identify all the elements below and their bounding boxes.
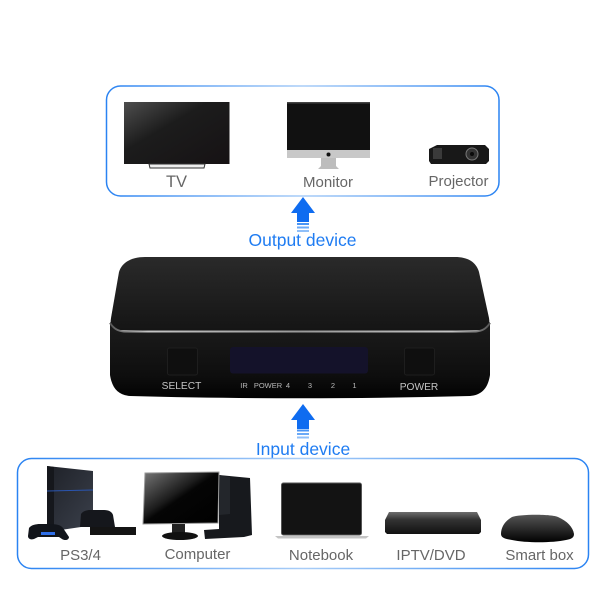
icon: notebook [275, 483, 369, 538]
label: indicators [240, 381, 357, 390]
label: PS3/4: PS3/4 [60, 547, 101, 564]
label: indicators: 4 [286, 381, 290, 390]
label: indicators: 2 [331, 381, 335, 390]
device: HDMI switch [110, 257, 490, 398]
icon: PS4 with controllers [28, 466, 136, 540]
icon: smart box [501, 515, 574, 542]
icon: monitor [287, 102, 370, 169]
panel: input devices [18, 458, 588, 568]
label: TV: TV [166, 173, 187, 191]
label: indicators: 3 [308, 381, 312, 390]
display window [230, 347, 368, 374]
label: Notebook: Notebook [289, 547, 354, 564]
heading: input device: Input device [256, 439, 350, 459]
label: IPTV/DVD: IPTV/DVD [396, 547, 466, 564]
label: SELECT: SELECT [162, 381, 201, 392]
label: Projector: Projector [428, 173, 489, 190]
label: indicators: IR [240, 381, 248, 390]
arrow: to device [291, 404, 315, 438]
label: indicators: POWER [254, 381, 283, 390]
power button [404, 348, 434, 375]
top surface [111, 257, 489, 333]
front face [110, 322, 490, 398]
icon: projector [429, 145, 489, 164]
icon: TV [124, 102, 230, 168]
icon: desktop computer [143, 472, 252, 540]
label: Computer: Computer [165, 546, 230, 563]
silver edge [110, 323, 490, 332]
select button [168, 348, 198, 375]
panel: output devices [106, 86, 499, 196]
label: POWER button: POWER [400, 382, 438, 393]
icon: DVD player [385, 512, 481, 534]
arrow: to output [291, 197, 315, 232]
heading: output device: Output device [249, 230, 356, 250]
label: Monitor: Monitor [303, 174, 353, 191]
label: indicators: 1 [352, 381, 357, 390]
label: Smart box: Smart box [505, 547, 574, 564]
